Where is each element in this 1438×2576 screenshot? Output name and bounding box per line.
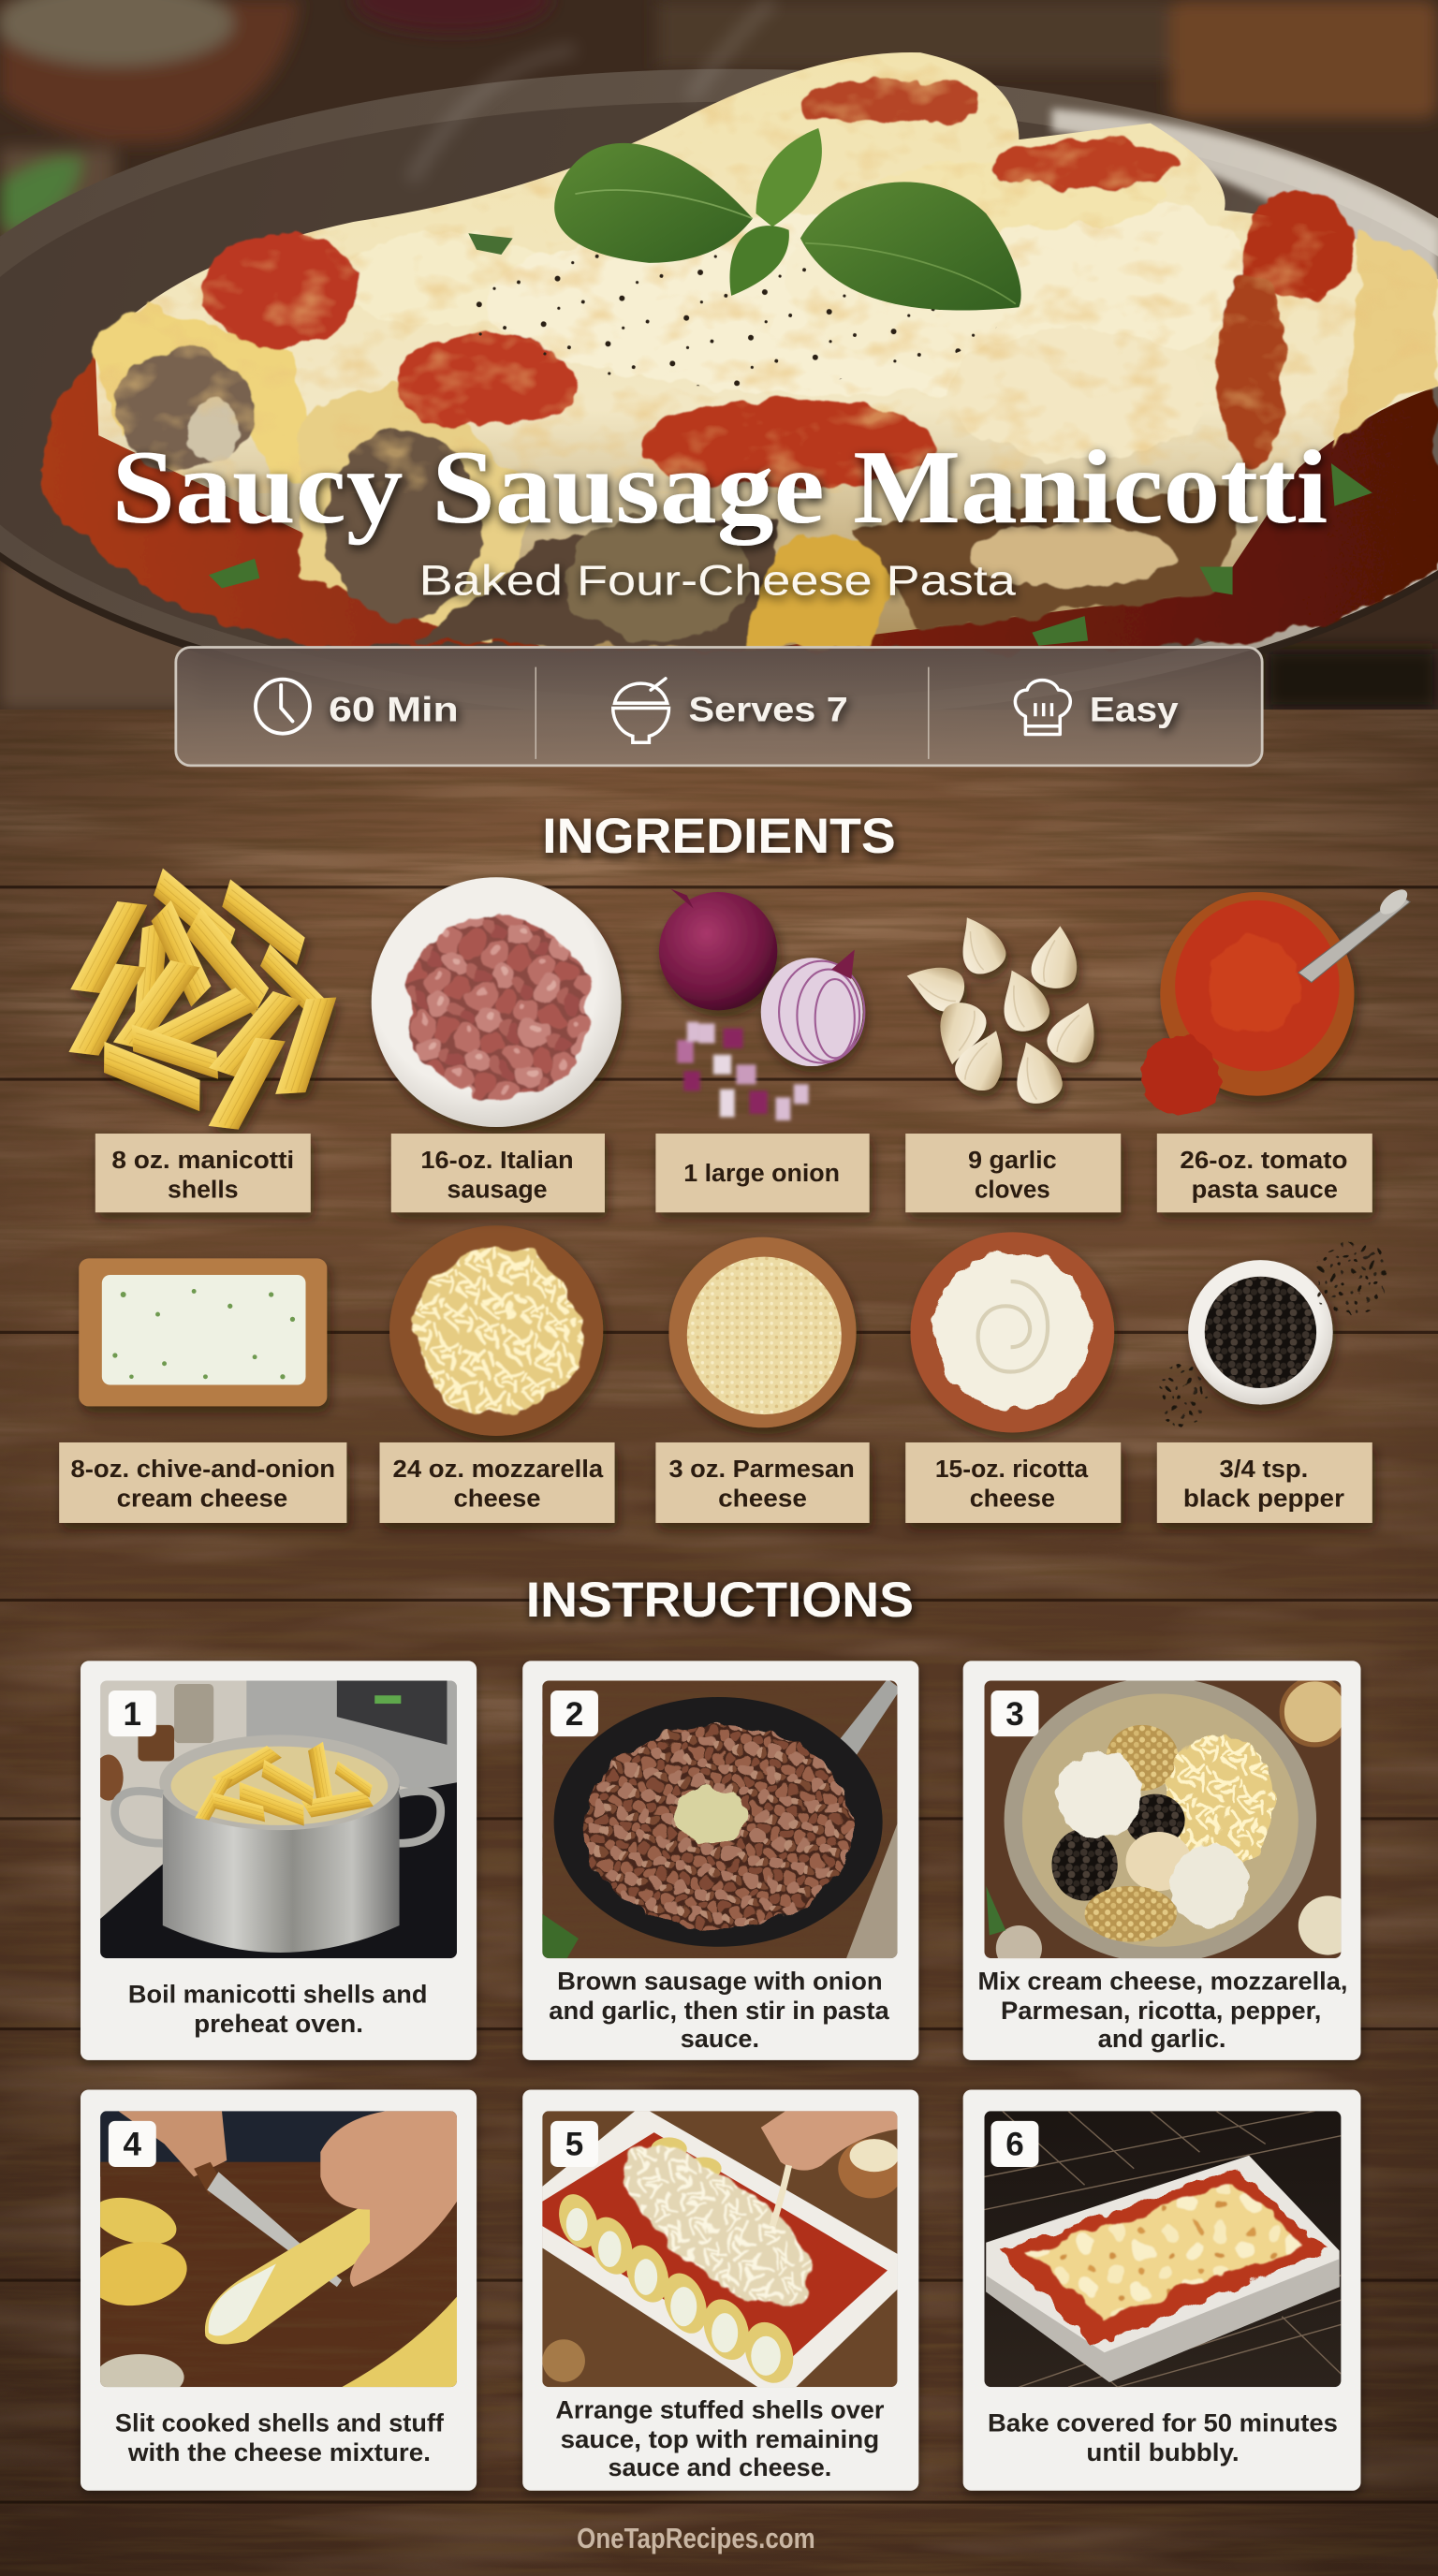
step 5 number badge: 5 [565, 2127, 583, 2163]
label text: black pepper: 3/4 tsp. [1220, 1455, 1308, 1483]
step 2 text: sauce. [681, 2025, 759, 2053]
label: italian sausage [391, 1134, 605, 1212]
label: manicotti shells [95, 1134, 311, 1212]
step 4 card [81, 2089, 477, 2491]
label text: italian sausage [420, 1146, 574, 1203]
step 3 text: Parmesan, ricotta, pepper, [1001, 1997, 1321, 2025]
label: garlic [905, 1134, 1121, 1212]
label text: mozzarella: cheese [453, 1484, 541, 1512]
label text: cream cheese: 8-oz. chive-and-onion [70, 1455, 335, 1483]
ingredient: garlic cloves [900, 909, 1108, 1109]
step 6 text: Bake covered for 50 minutes [988, 2409, 1338, 2437]
sauce pool [39, 356, 1438, 646]
step 3 number badge [991, 1690, 1038, 1736]
label text: ricotta [935, 1455, 1088, 1512]
time label: 60 Min [329, 690, 459, 728]
step 6 text [988, 2409, 1338, 2466]
step 2 number badge [550, 1690, 598, 1736]
step 4 number badge: 4 [124, 2127, 142, 2163]
step 2 card [522, 1661, 918, 2060]
step 5 card [522, 2089, 920, 2491]
hero photo: baked manicotti on a plate [0, 0, 1438, 728]
step 5 text: sauce and cheese. [609, 2453, 831, 2481]
step 4 text: Slit cooked shells and stuff [115, 2409, 445, 2437]
step 4 photo: slitting and stuffing shells [84, 2111, 457, 2400]
step 2 photo: sausage in skillet [542, 1679, 901, 1958]
ingredient: black pepper in white dish [1157, 1242, 1387, 1429]
label text: tomato sauce [1180, 1146, 1347, 1203]
step 6 number badge: 6 [1005, 2127, 1024, 2163]
label text: parmesan [668, 1455, 855, 1512]
ingredient: italian sausage in white bowl [372, 877, 622, 1127]
step 3 text [977, 1967, 1347, 2053]
heading: ingredients: INGREDIENTS [542, 809, 896, 864]
step 5 text: sauce, top with remaining [561, 2425, 879, 2453]
label text: manicotti shells: shells [168, 1175, 239, 1203]
label text: ricotta: 15-oz. ricotta [935, 1455, 1088, 1483]
icon: bowl [613, 679, 668, 742]
label text: black pepper [1183, 1455, 1344, 1512]
subtitle: Baked Four-Cheese Pasta [419, 556, 1017, 604]
heading: instructions: INSTRUCTIONS [526, 1573, 914, 1628]
step 6 photo: dish baking in the oven [985, 2111, 1341, 2387]
step 1 text: Boil manicotti shells and [128, 1980, 427, 2008]
step 2 number badge: 2 [565, 1696, 583, 1733]
step 4 number badge [109, 2121, 156, 2167]
servings label: Serves 7 [689, 690, 848, 728]
diced onion [677, 1022, 809, 1120]
small herb flecks [209, 463, 1372, 646]
step 4 text [115, 2409, 445, 2466]
ingredient: ricotta in terracotta bowl [911, 1232, 1114, 1432]
label: onion [655, 1134, 870, 1212]
label text: black pepper: black pepper [1183, 1484, 1344, 1512]
label text: mozzarella: 24 oz. mozzarella [393, 1455, 604, 1483]
step 2 text: Brown sausage with onion [557, 1967, 883, 1995]
plate [0, 69, 1438, 728]
label text: tomato sauce: 26-oz. tomato [1180, 1146, 1347, 1174]
label: tomato sauce [1157, 1134, 1372, 1212]
info bar [176, 648, 1262, 766]
step 3 number badge: 3 [1005, 1696, 1024, 1733]
label: parmesan [655, 1442, 870, 1523]
step 3 text: and garlic. [1098, 2025, 1226, 2053]
step 1 number badge: 1 [124, 1696, 141, 1733]
label text: cream cheese [70, 1455, 335, 1512]
step 1 number badge [109, 1690, 156, 1736]
ingredient: red onion [659, 889, 864, 1120]
step 5 text: Arrange stuffed shells over [555, 2396, 885, 2424]
step 6 number badge [991, 2121, 1038, 2167]
label: black pepper [1157, 1442, 1372, 1523]
label: cream cheese [59, 1442, 346, 1523]
label text: italian sausage: sausage [447, 1175, 548, 1203]
ingredient: parmesan in wood bowl [668, 1237, 857, 1427]
label text: garlic [968, 1146, 1057, 1203]
step 3 text: Mix cream cheese, mozzarella, [977, 1967, 1347, 1995]
step 1 card [81, 1661, 477, 2060]
step 6 card [963, 2089, 1360, 2491]
blurred table background with bowl and props [0, 0, 1438, 710]
label: ricotta [905, 1442, 1121, 1523]
step 5 text [555, 2396, 885, 2481]
difficulty label: Easy [1090, 690, 1179, 728]
step 5 number badge [550, 2121, 598, 2167]
step 6 text: until bubbly. [1086, 2438, 1240, 2466]
label text: tomato sauce: pasta sauce [1192, 1175, 1338, 1203]
icon: chef hat [1015, 681, 1070, 735]
step 1 photo: pot of boiling shells [94, 1680, 457, 1958]
step 3 photo: cheese mixture in steel bowl [985, 1677, 1357, 1971]
basil leaves [468, 128, 1021, 311]
step 3 card [963, 1661, 1360, 2060]
ingredient: mozzarella in wood bowl [389, 1225, 603, 1436]
label text: mozzarella [393, 1455, 604, 1512]
label text: parmesan: cheese [718, 1484, 807, 1512]
step 1 text [128, 1980, 427, 2038]
label: mozzarella [380, 1442, 615, 1523]
label text: cream cheese: cream cheese [117, 1484, 287, 1512]
step 2 text [549, 1967, 890, 2053]
footer website: OneTapRecipes.com [577, 2522, 815, 2554]
title: Saucy Sausage Manicotti [111, 430, 1328, 546]
steam wisps [411, 0, 772, 181]
step 4 text: with the cheese mixture. [127, 2438, 431, 2466]
label text: parmesan: 3 oz. Parmesan [668, 1455, 855, 1483]
ingredient: manicotti shells [68, 869, 336, 1139]
ingredient: chive and onion cream cheese [79, 1258, 327, 1406]
ingredient: tomato pasta sauce jar [1140, 886, 1412, 1116]
pasta and melted cheese [0, 50, 1438, 649]
label text: manicotti shells: 8 oz. manicotti [111, 1146, 294, 1174]
label text: ricotta: cheese [970, 1484, 1055, 1512]
step 2 text: and garlic, then stir in pasta [549, 1997, 890, 2025]
label text: garlic: cloves [975, 1175, 1050, 1203]
label text: onion: 1 large onion [683, 1159, 840, 1187]
step 5 photo: assembling the baking dish [535, 2106, 920, 2402]
label text: garlic: 9 garlic [968, 1146, 1057, 1174]
step 1 text: preheat oven. [194, 2010, 363, 2038]
icon: clock [256, 680, 310, 734]
label text: italian sausage: 16-oz. Italian [420, 1146, 574, 1174]
label text: manicotti shells [111, 1146, 294, 1203]
